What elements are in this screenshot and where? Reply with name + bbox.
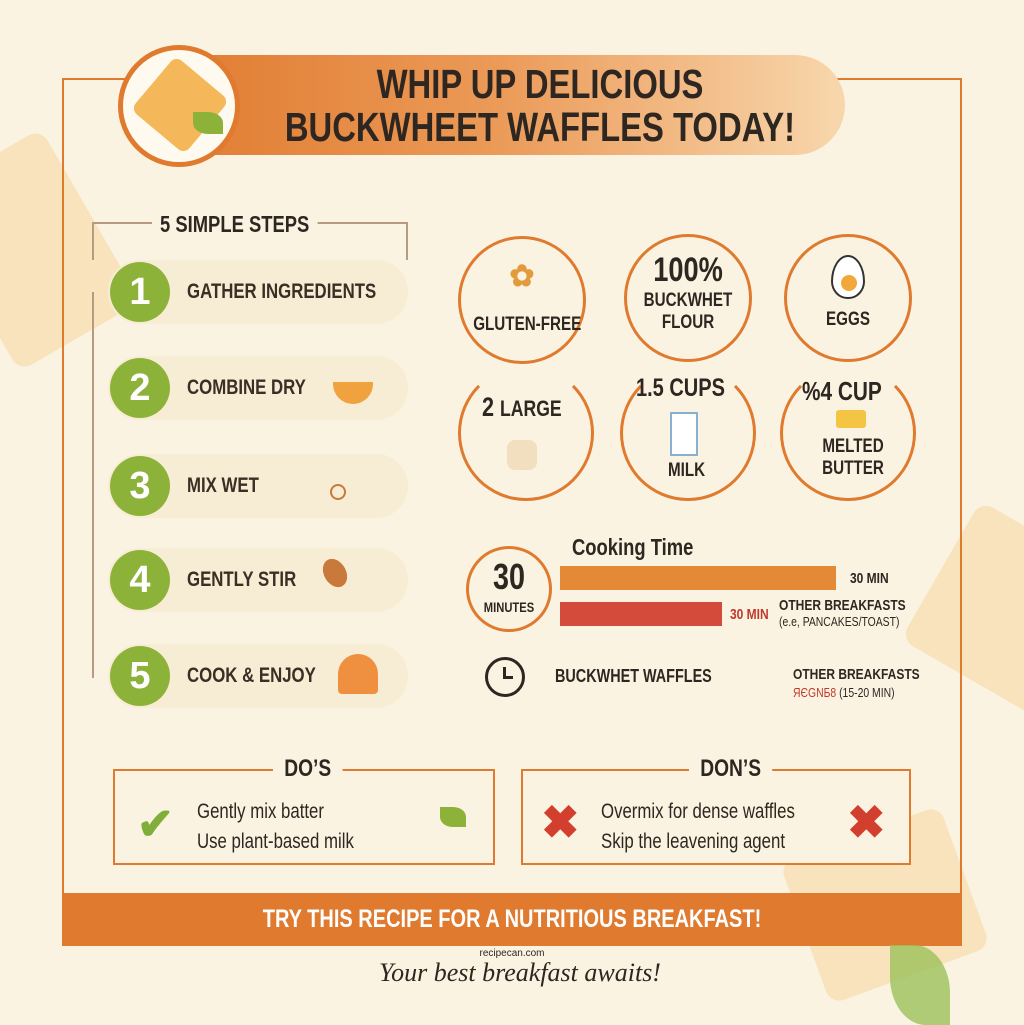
circle: gluten-free: GLUTEN-FREE [473, 314, 581, 335]
text: BUTTER [822, 458, 884, 479]
title: WHIP UP DELICIOUS [377, 61, 703, 107]
panel: do's: Use plant-based milk [197, 830, 354, 853]
step 5: 5 [129, 655, 151, 697]
panel: don'ts: ✖ [541, 796, 580, 848]
title [285, 61, 795, 150]
panel: don'ts: Overmix for dense waffles [601, 800, 795, 823]
panel: do's: ✔ [137, 800, 174, 849]
step 4: GENTLY STIR [187, 568, 296, 591]
panel: do's [113, 769, 495, 865]
footer tagline: Your best breakfast awaits! [379, 958, 661, 987]
step 3: 3 [129, 465, 151, 507]
step 4 [108, 548, 408, 612]
circle: gluten-free: ✿ [509, 260, 535, 293]
circle: eggs: EGGS [826, 309, 870, 330]
circle: 100% buckwheat flour: FLOUR [662, 312, 714, 333]
icon: 30 minutes badge: 30 [493, 556, 525, 597]
icon: clock [485, 657, 525, 697]
step connector line [92, 292, 94, 678]
step 1: GATHER INGREDIENTS [187, 280, 376, 303]
panel: don'ts: Skip the leavening agent [601, 830, 785, 853]
step 2 [108, 356, 408, 420]
bar chart: OTHER BREAKFASTS [779, 597, 906, 614]
footer url: recipecan.com [479, 948, 545, 959]
panel: don'ts: ✖ [847, 796, 886, 848]
half circle: 2 large [458, 365, 594, 501]
step 2: 2 [129, 367, 151, 409]
circle: 100% buckwheat flour [624, 234, 752, 362]
title: BUCKWHEET WAFFLES TODAY! [285, 104, 795, 150]
background waffle bottom right [779, 805, 991, 1005]
text: 2 LARGE [482, 392, 562, 422]
bar chart: 30 MIN [850, 570, 889, 587]
step 1 [108, 260, 408, 324]
circle: 100% buckwheat flour: 100% [653, 251, 723, 289]
background waffle right [901, 501, 1024, 719]
header pill [150, 55, 845, 155]
icon: 30 minutes badge [466, 546, 552, 632]
step 5: COOK & ENJOY [187, 664, 316, 687]
circle: 100% buckwheat flour: BUCKWHET [644, 290, 732, 311]
step 3: MIX WET [187, 474, 259, 497]
icon: waffle logo [118, 45, 240, 167]
step 2: COMBINE DRY [187, 376, 306, 399]
text: OTHER BREAKFASTS [793, 666, 920, 683]
half circle: butter [780, 365, 916, 501]
banner [62, 893, 962, 946]
icon: 30 minutes badge: MINUTES [484, 599, 534, 615]
step 4: 4 [129, 559, 151, 601]
background waffle left [0, 128, 141, 372]
text: ЯЄGNБ8 (15-20 MIN) [793, 685, 895, 700]
steps heading [92, 222, 408, 260]
bar chart: 30 MIN [730, 606, 769, 623]
bar chart: (e.e, PANCAKES/TOAST) [779, 614, 899, 629]
text: DON’S [700, 755, 761, 782]
panel: do's: Gently mix batter [197, 800, 324, 823]
text: MELTED [822, 436, 884, 457]
step 5 [108, 644, 408, 708]
text: DO’S [284, 755, 331, 782]
text: MILK [668, 460, 705, 481]
leaf decoration [890, 945, 950, 1025]
circle: eggs [784, 234, 912, 362]
half circle: milk [620, 365, 756, 501]
text: %4 CUP [802, 376, 882, 406]
step 3 [108, 454, 408, 518]
bar chart [560, 566, 906, 629]
circle: gluten-free [458, 236, 586, 364]
cooking time heading: Cooking Time [572, 534, 693, 560]
text: 1.5 CUPS [636, 374, 725, 402]
frame [62, 78, 962, 946]
steps heading: 5 SIMPLE STEPS [160, 211, 309, 237]
step 1: 1 [129, 271, 151, 313]
legend: BUCKWHET WAFFLES [555, 666, 712, 686]
banner: TRY THIS RECIPE FOR A NUTRITIOUS BREAKFAST! [263, 905, 761, 933]
panel: don'ts [521, 769, 911, 865]
